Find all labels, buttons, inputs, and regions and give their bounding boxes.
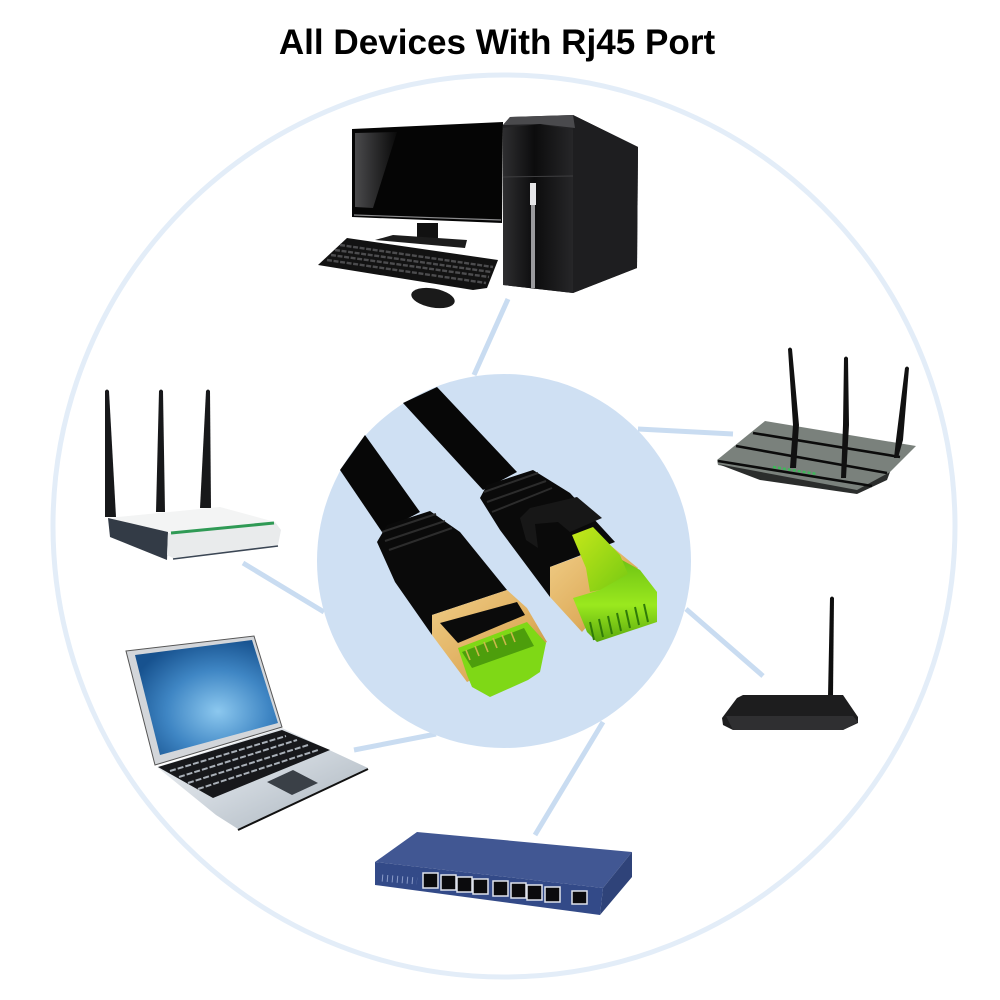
connector lines bbox=[243, 299, 763, 835]
status LEDs bbox=[382, 878, 417, 881]
icon: black router right top bbox=[717, 348, 916, 494]
icon: laptop bbox=[126, 636, 368, 830]
mouse bbox=[410, 285, 456, 311]
icon: white router left bbox=[105, 390, 281, 560]
icon: network switch bbox=[375, 832, 632, 915]
icon: small black router bbox=[722, 596, 858, 730]
icon: desktop computer bbox=[318, 115, 638, 311]
keyboard bbox=[318, 238, 498, 290]
center circle bbox=[317, 374, 691, 748]
ports bbox=[423, 873, 587, 904]
right plug bbox=[403, 387, 657, 642]
tower bbox=[503, 115, 638, 293]
left plug bbox=[340, 435, 547, 697]
ethernet cable bbox=[340, 387, 657, 697]
monitor bbox=[352, 122, 503, 248]
title: All Devices With Rj45 Port bbox=[279, 23, 715, 62]
